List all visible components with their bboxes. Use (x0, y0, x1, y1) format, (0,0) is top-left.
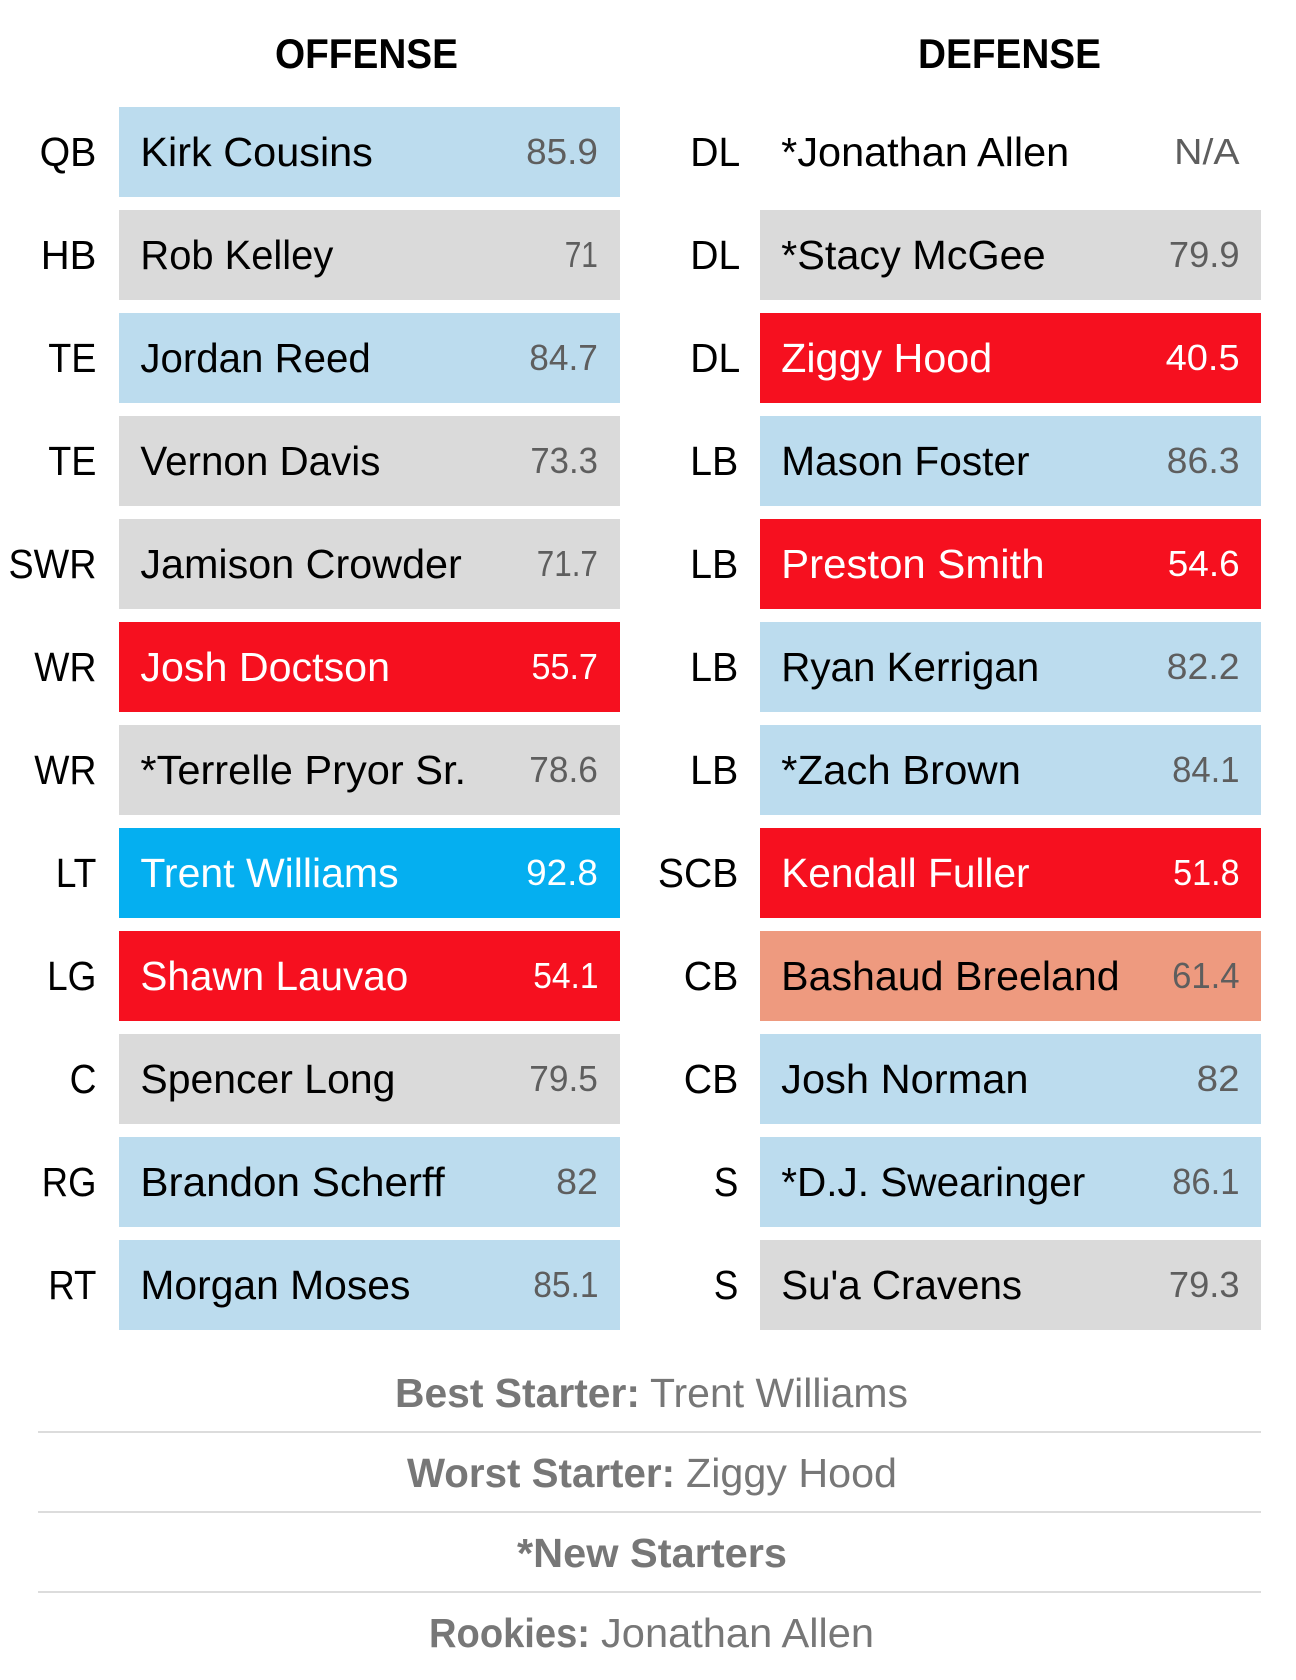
row: LG Shawn Lauvao 54.1: 54.1 (533, 955, 599, 996)
row: S D.J. Swearinger 86.1: 86.1 (1172, 1161, 1240, 1202)
row: QB Kirk Cousins 85.9: Kirk Cousins (140, 129, 373, 175)
row: SWR Jamison Crowder 71.7: Jamison Crowder (140, 541, 462, 587)
row: TE Vernon Davis 73.3: TE (48, 438, 96, 484)
row: LB Preston Smith 54.6 (690, 519, 1261, 609)
row: WR Terrelle Pryor Sr. 78.6: *Terrelle Pryor Sr. (140, 747, 466, 793)
row: LB Preston Smith 54.6: 54.6 (1168, 543, 1240, 584)
row: CB Bashaud Breeland 61.4: CB (684, 953, 738, 999)
row: CB Bashaud Breeland 61.4 (684, 931, 1261, 1021)
row: DL Jonathan Allen N/A: N/A (1174, 131, 1240, 172)
note: new starters: *New Starters (517, 1530, 787, 1576)
note: rookies (429, 1610, 874, 1656)
row: TE Vernon Davis 73.3: 73.3 (530, 440, 598, 481)
row: WR Josh Doctson 55.7: 55.7 (532, 646, 598, 687)
row: SCB Kendall Fuller 51.8: SCB (658, 850, 738, 896)
panel: footer notes (38, 1370, 1261, 1656)
row: RG Brandon Scherff 82: Brandon Scherff (140, 1159, 445, 1205)
row: CB Josh Norman 82: Josh Norman (781, 1056, 1028, 1102)
row: LB Zach Brown 84.1: LB (690, 747, 738, 793)
row: LT Trent Williams 92.8: LT (56, 850, 96, 896)
row: LB Preston Smith 54.6: Preston Smith (781, 541, 1045, 587)
row: RT Morgan Moses 85.1 (48, 1240, 620, 1330)
row: CB Josh Norman 82: CB (684, 1056, 738, 1102)
row: LB Preston Smith 54.6: LB (690, 541, 738, 587)
row: HB Rob Kelley 71: Rob Kelley (140, 232, 334, 278)
row: LB Zach Brown 84.1 (690, 725, 1261, 815)
row: SWR Jamison Crowder 71.7: SWR (8, 541, 96, 587)
row: WR Terrelle Pryor Sr. 78.6 (34, 725, 620, 815)
note: best starter: Trent Williams (650, 1370, 908, 1416)
row: TE Vernon Davis 73.3: Vernon Davis (140, 438, 380, 484)
row: LT Trent Williams 92.8: 92.8 (526, 852, 598, 893)
row: SWR Jamison Crowder 71.7 (8, 519, 620, 609)
row: LT Trent Williams 92.8 (56, 828, 620, 918)
row: LG Shawn Lauvao 54.1: Shawn Lauvao (140, 953, 408, 999)
row: LB Zach Brown 84.1: *Zach Brown (781, 747, 1021, 793)
row: RT Morgan Moses 85.1: 85.1 (533, 1264, 599, 1305)
row: DL Ziggy Hood 40.5 (690, 313, 1261, 403)
row: TE Jordan Reed 84.7: 84.7 (529, 337, 598, 378)
row: WR Terrelle Pryor Sr. 78.6: 78.6 (529, 749, 598, 790)
row: RG Brandon Scherff 82: RG (42, 1159, 96, 1205)
row: C Spencer Long 79.5: 79.5 (529, 1058, 598, 1099)
row: QB Kirk Cousins 85.9 (40, 107, 620, 197)
row: DL Stacy McGee 79.9: DL (690, 232, 740, 278)
row: C Spencer Long 79.5: C (70, 1056, 96, 1102)
row: SCB Kendall Fuller 51.8 (658, 828, 1261, 918)
row: DL Stacy McGee 79.9: *Stacy McGee (781, 232, 1046, 278)
row: DL Ziggy Hood 40.5: Ziggy Hood (781, 335, 992, 381)
row: DL Ziggy Hood 40.5: 40.5 (1166, 337, 1240, 378)
row: LB Ryan Kerrigan 82.2: LB (690, 644, 738, 690)
row: DL Stacy McGee 79.9 (690, 210, 1261, 300)
panel: defense roster (658, 129, 1261, 1330)
row: DL Jonathan Allen N/A: DL (690, 129, 740, 175)
row: DL Ziggy Hood 40.5: DL (690, 335, 740, 381)
panel: offense roster (8, 107, 620, 1330)
row: DL Jonathan Allen N/A: *Jonathan Allen (781, 129, 1069, 175)
row: LB Ryan Kerrigan 82.2: 82.2 (1167, 646, 1240, 687)
row: CB Bashaud Breeland 61.4: 61.4 (1172, 955, 1240, 996)
row: WR Terrelle Pryor Sr. 78.6: WR (34, 747, 96, 793)
row: SCB Kendall Fuller 51.8: Kendall Fuller (781, 850, 1030, 896)
row: RG Brandon Scherff 82 (42, 1137, 620, 1227)
row: S D.J. Swearinger 86.1: S (714, 1159, 738, 1205)
row: S D.J. Swearinger 86.1: *D.J. Swearinger (781, 1159, 1085, 1205)
row: RG Brandon Scherff 82: 82 (556, 1161, 598, 1202)
row: SCB Kendall Fuller 51.8: 51.8 (1173, 852, 1240, 893)
heading: offense: OFFENSE (275, 30, 458, 77)
note: worst starter: Ziggy Hood (686, 1450, 897, 1496)
row: QB Kirk Cousins 85.9: 85.9 (526, 131, 598, 172)
row: RT Morgan Moses 85.1: RT (48, 1262, 96, 1308)
note: worst starter (407, 1450, 897, 1496)
row: LT Trent Williams 92.8: Trent Williams (140, 850, 399, 896)
row: HB Rob Kelley 71: 71 (565, 234, 598, 275)
row: QB Kirk Cousins 85.9: QB (40, 129, 96, 175)
row: HB Rob Kelley 71: HB (41, 232, 96, 278)
row: C Spencer Long 79.5 (70, 1034, 620, 1124)
row: RT Morgan Moses 85.1: Morgan Moses (140, 1262, 410, 1308)
row: LB Zach Brown 84.1: 84.1 (1172, 749, 1240, 790)
note: worst starter: Worst Starter: (407, 1450, 675, 1496)
row: CB Bashaud Breeland 61.4: Bashaud Breeland (781, 953, 1120, 999)
row: LG Shawn Lauvao 54.1 (47, 931, 620, 1021)
row: LB Mason Foster 86.3: Mason Foster (781, 438, 1030, 484)
row: CB Josh Norman 82 (684, 1034, 1261, 1124)
row: WR Josh Doctson 55.7: WR (34, 644, 96, 690)
row: S D.J. Swearinger 86.1 (714, 1137, 1261, 1227)
row: LB Mason Foster 86.3: 86.3 (1167, 440, 1240, 481)
row: TE Jordan Reed 84.7: TE (48, 335, 96, 381)
row: WR Josh Doctson 55.7 (34, 622, 620, 712)
row: SWR Jamison Crowder 71.7: 71.7 (537, 543, 598, 584)
row: C Spencer Long 79.5: Spencer Long (140, 1056, 395, 1102)
row: DL Stacy McGee 79.9: 79.9 (1169, 234, 1240, 275)
row: S Su'a Cravens 79.3: S (714, 1262, 738, 1308)
row: LB Ryan Kerrigan 82.2: Ryan Kerrigan (781, 644, 1039, 690)
row: LB Ryan Kerrigan 82.2 (690, 622, 1261, 712)
row: S Su'a Cravens 79.3: 79.3 (1169, 1264, 1240, 1305)
row: TE Jordan Reed 84.7 (48, 313, 620, 403)
row: TE Jordan Reed 84.7: Jordan Reed (140, 335, 371, 381)
row: S Su'a Cravens 79.3: Su'a Cravens (781, 1262, 1022, 1308)
note: rookies: Rookies: (429, 1610, 590, 1656)
row: WR Josh Doctson 55.7: Josh Doctson (140, 644, 390, 690)
row: S Su'a Cravens 79.3 (714, 1240, 1261, 1330)
row: CB Josh Norman 82: 82 (1197, 1058, 1240, 1099)
row: HB Rob Kelley 71 (41, 210, 620, 300)
heading: defense: DEFENSE (918, 30, 1101, 77)
row: LB Mason Foster 86.3 (690, 416, 1261, 506)
row: TE Vernon Davis 73.3 (48, 416, 620, 506)
note: rookies: Jonathan Allen (601, 1610, 874, 1656)
note: best starter (395, 1370, 908, 1416)
row: LG Shawn Lauvao 54.1: LG (47, 953, 96, 999)
row: DL Jonathan Allen N/A (690, 129, 1240, 175)
note: best starter: Best Starter: (395, 1370, 640, 1416)
row: LB Mason Foster 86.3: LB (690, 438, 738, 484)
